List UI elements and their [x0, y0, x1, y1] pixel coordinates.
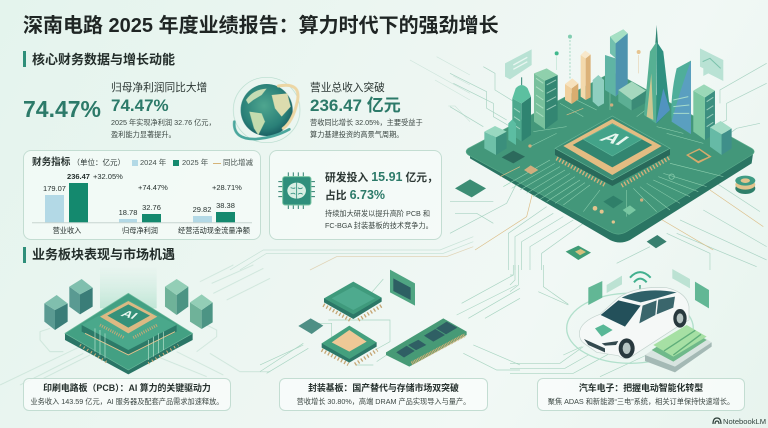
icon: AI brain chip — [278, 172, 315, 209]
circuit board — [466, 73, 754, 242]
packaging illustration — [260, 265, 520, 373]
building: central spire tower — [644, 25, 670, 124]
building: sail tower — [671, 61, 691, 134]
text block: net profit: 2025 年实现净利润 32.76 亿元， — [111, 118, 216, 127]
signal beams and cards — [588, 269, 709, 308]
chart title: 财务指标 （单位：亿元） — [32, 157, 125, 168]
board traces — [500, 90, 723, 217]
server racks right — [165, 279, 213, 329]
text block: net profit — [111, 82, 216, 139]
R&D description: 持续加大研发以提升高阶 PCB 和 — [325, 209, 430, 218]
heading: segments and market opportunities: 业务板块表现与市场机遇 — [32, 247, 175, 262]
top chip — [323, 282, 383, 320]
data labels: 营业收入 — [53, 226, 81, 235]
caption: packaging substrate: 封装基板：国产替代与存储市场双突破 — [308, 383, 459, 393]
floating chat cards — [505, 35, 723, 81]
NotebookLM watermark: NotebookLM — [723, 417, 766, 426]
legend — [132, 158, 253, 167]
bottom chip with gold lid — [322, 326, 377, 364]
building: small box left — [484, 126, 507, 155]
caption: automotive electronics: 汽车电子：把握电动智能化转型 — [579, 383, 703, 393]
label: AI: AI — [595, 130, 633, 148]
icon: NotebookLM logo — [713, 418, 721, 424]
memory module — [386, 318, 467, 367]
data labels: +32.05% — [93, 172, 123, 181]
panel: R&D investment — [269, 150, 442, 240]
text block: total revenue: 算力基建投资的高景气周期。 — [310, 130, 403, 139]
text block: net profit: 74.47% — [111, 96, 169, 115]
chart bars — [32, 183, 252, 224]
building: spire left — [508, 77, 531, 145]
label: AI: AI — [118, 309, 140, 321]
caption: automotive electronics — [537, 378, 745, 411]
building: tall green — [534, 68, 558, 129]
electric car — [579, 287, 689, 358]
traces — [510, 265, 693, 377]
R&D headline: 研发投入 15.91 亿元， — [325, 170, 438, 184]
text block: total revenue: 236.47 亿元 — [310, 96, 401, 115]
building: orange towers — [565, 51, 604, 107]
outer circuit traces — [450, 63, 767, 270]
panel: financial indicators chart — [23, 150, 261, 240]
PCB illustration — [44, 267, 213, 374]
legend: 2025 年 — [182, 158, 208, 167]
data labels: 38.38 — [216, 201, 235, 210]
text block: total revenue: 营收同比增长 32.05%，主要受益于 — [310, 118, 423, 127]
text block: total revenue — [310, 82, 423, 139]
data labels: +28.71% — [212, 183, 242, 192]
building: teal tall — [605, 29, 628, 97]
data labels: 32.76 — [142, 203, 161, 212]
legend: 同比增减 — [223, 158, 253, 167]
text block: net profit: 归母净利润同比大增 — [111, 82, 207, 94]
text block: net profit: 盈利能力显著提升。 — [111, 130, 176, 139]
caption: PCB: 印刷电路板（PCB）：AI 算力的关键驱动力 — [43, 383, 211, 393]
data labels: +74.47% — [138, 183, 168, 192]
data labels: 归母净利润 — [122, 226, 158, 235]
automotive illustration — [510, 265, 712, 377]
battery pack — [645, 325, 712, 372]
building: cube — [618, 82, 646, 111]
data labels: 29.82 — [193, 205, 211, 214]
title: 深南电路 2025 年度业绩报告：算力时代下的强劲增长 — [23, 15, 499, 37]
data labels — [43, 172, 250, 235]
PCB board — [65, 333, 193, 374]
R&D description — [325, 209, 433, 230]
caption: packaging substrate: 营收增长 30.80%，高端 DRAM 产品实现导入与量产。 — [297, 397, 470, 406]
building: right blocks — [693, 84, 732, 155]
background circuit traces — [0, 57, 473, 385]
R&D share: 占比 6.73% — [325, 188, 385, 202]
caption: automotive electronics: 聚焦 ADAS 和新能源“三电”系统，相关订单保持快速增长。 — [548, 397, 734, 406]
small board components — [502, 103, 712, 224]
data labels: 经营活动现金流量净额 — [178, 226, 250, 235]
legend: 2024 年 — [140, 158, 166, 167]
icon: globe — [233, 77, 300, 143]
traces — [260, 265, 520, 373]
off-board components — [455, 176, 755, 260]
text block: total revenue: 营业总收入突破 — [310, 82, 385, 94]
caption: PCB: 业务收入 143.59 亿元，AI 服务器及配套产品需求加速释放。 — [31, 397, 223, 406]
die card — [390, 270, 415, 306]
small chip — [298, 318, 323, 334]
R&D description: FC-BGA 封装基板的技术竞争力。 — [325, 220, 433, 230]
data labels: 236.47 — [67, 172, 90, 181]
central AI chip — [555, 116, 670, 186]
main illustration: AI chip city on circuit board — [450, 25, 767, 270]
server racks left — [44, 279, 93, 330]
data labels: 179.07 — [43, 184, 66, 193]
caption: PCB — [23, 378, 231, 411]
data labels: 18.78 — [119, 208, 137, 217]
caption: packaging substrate — [279, 378, 488, 411]
big number: 74.47%: 74.47% — [23, 96, 101, 122]
heading: core financial data: 核心财务数据与增长动能 — [32, 52, 175, 66]
